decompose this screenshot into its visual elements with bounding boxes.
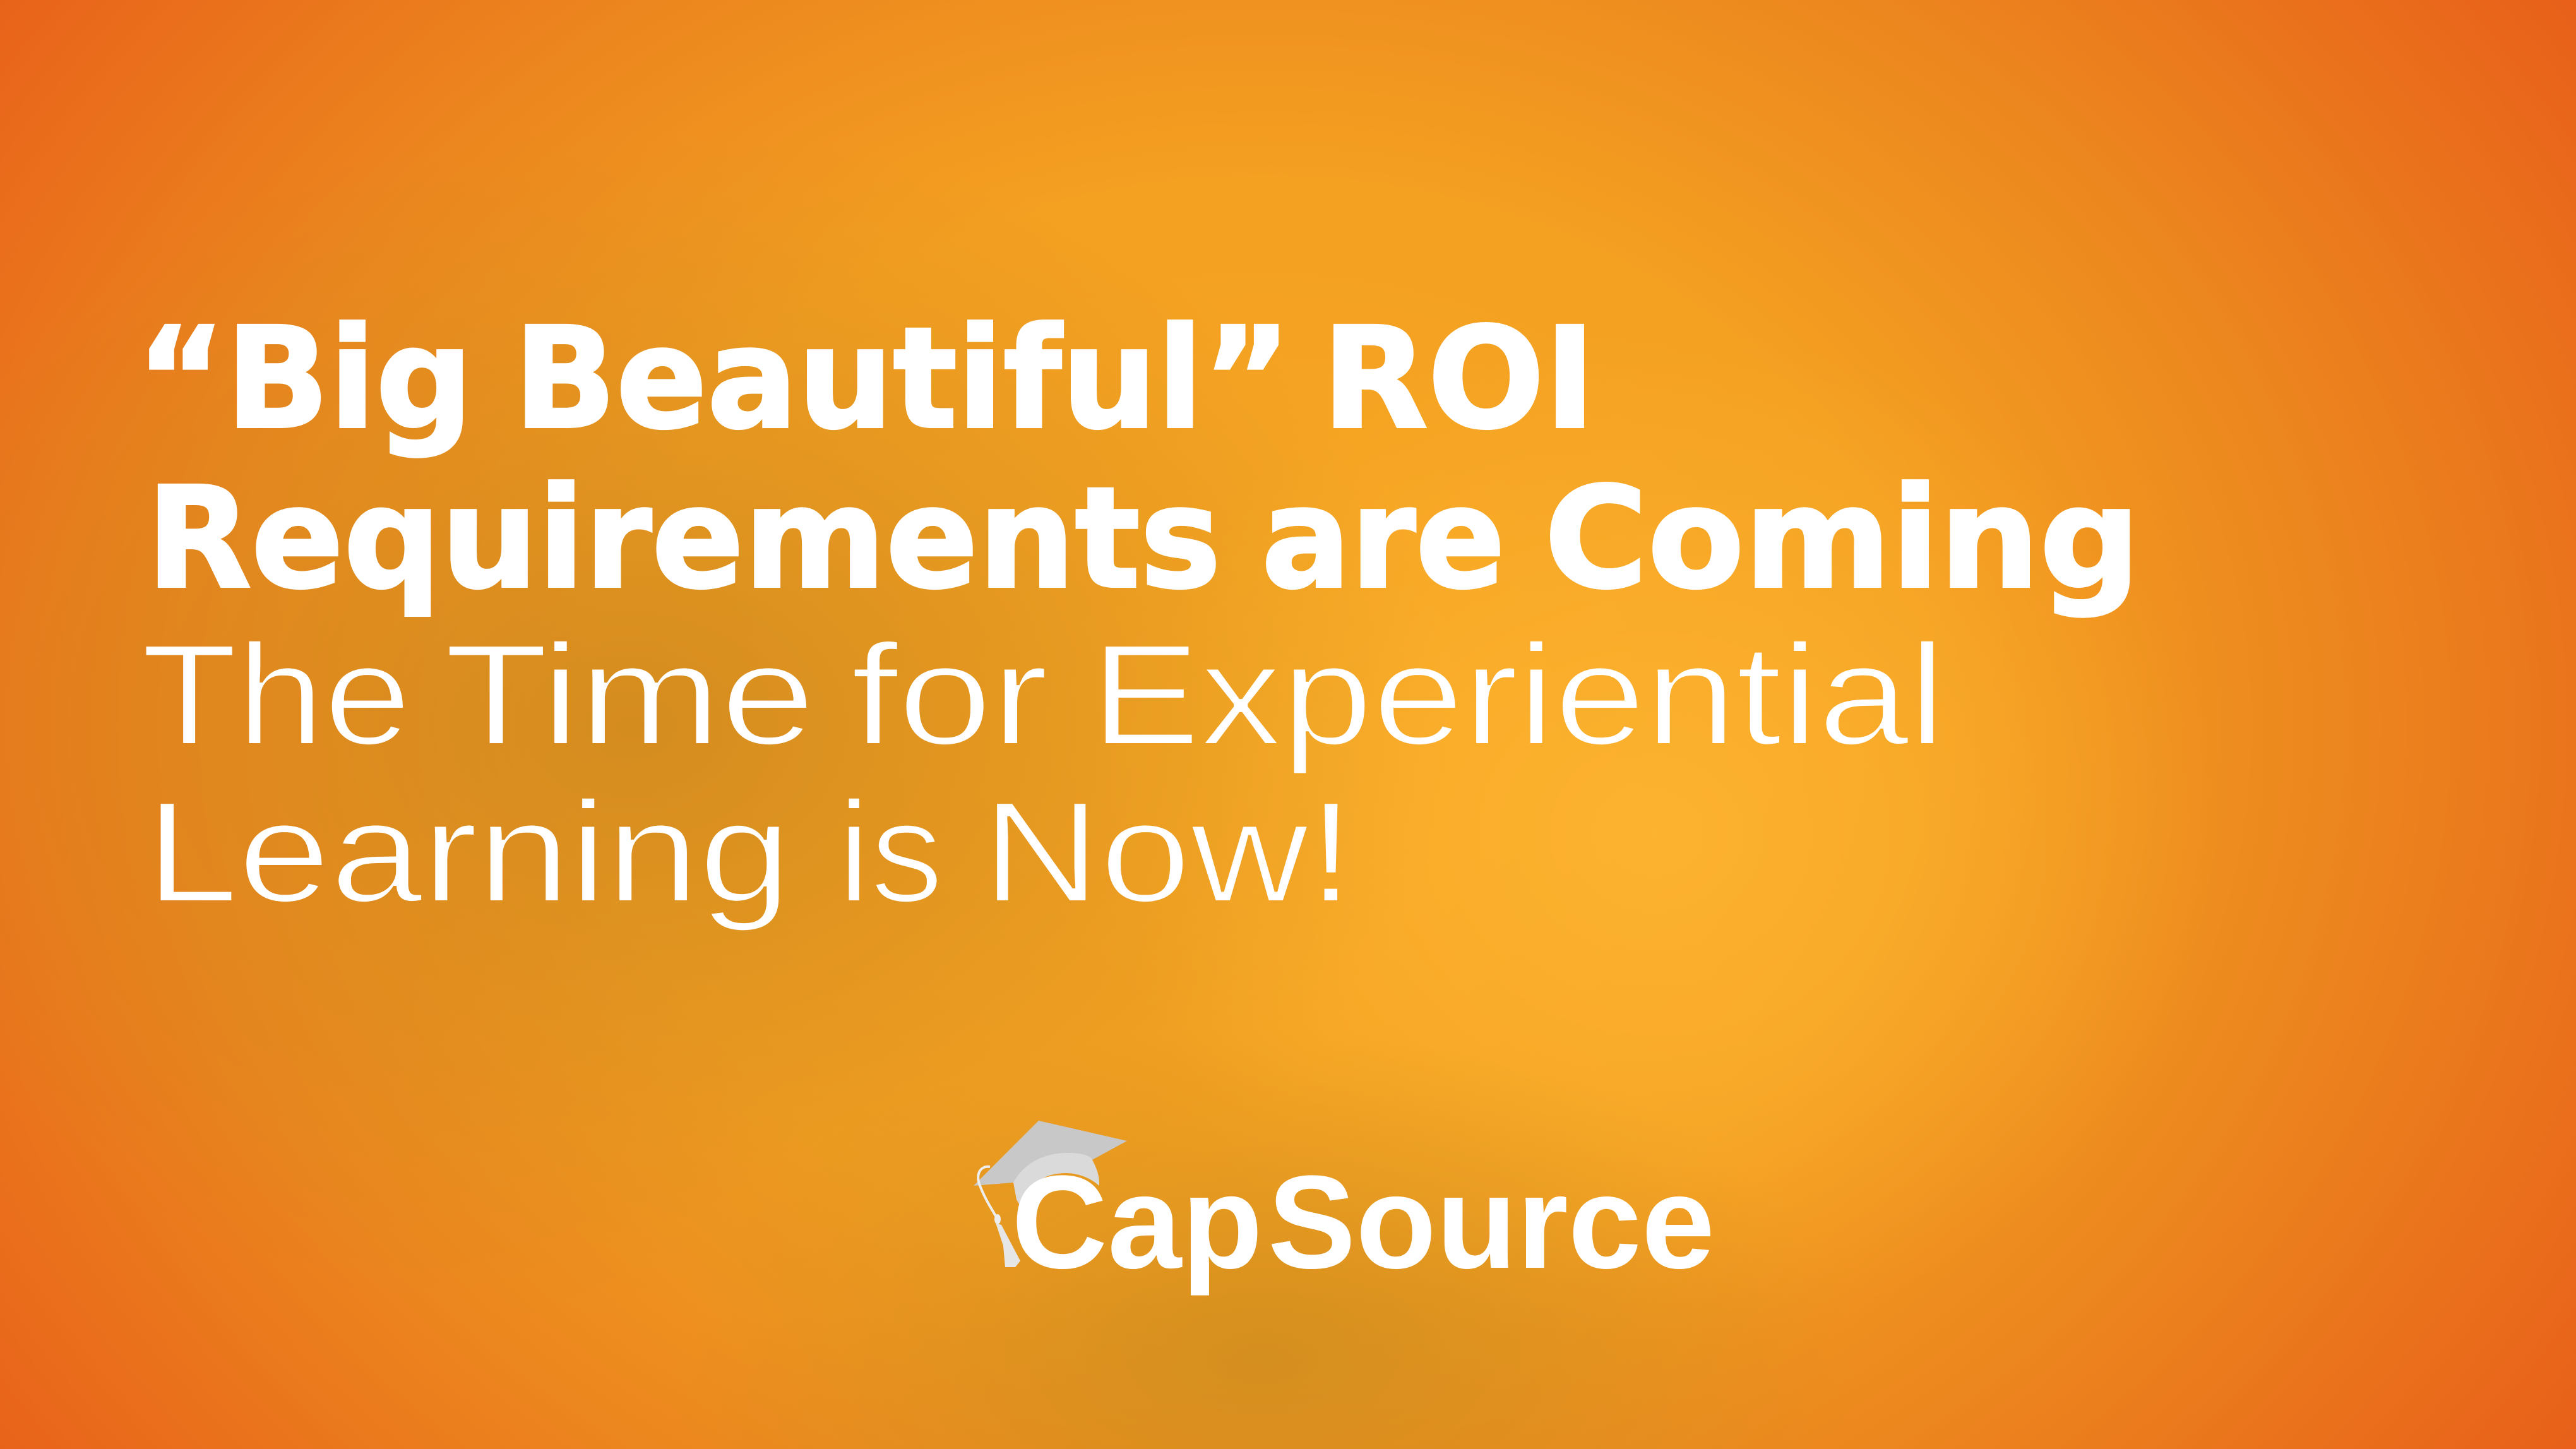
- subtitle: light headline: Learning: [146, 772, 791, 933]
- subtitle: light headline: for: [851, 615, 1048, 775]
- logo wordmark: Cap: [1011, 1148, 1263, 1296]
- subtitle: light headline: is: [838, 772, 943, 933]
- subtitle: light headline: Time: [444, 615, 815, 775]
- title: bold headline: Coming: [1544, 458, 2140, 620]
- subtitle: light headline: Experiential: [1091, 615, 1945, 775]
- title: bold headline: ROI: [1322, 298, 1595, 460]
- logo wordmark: [1011, 1148, 1715, 1296]
- title: bold headline: Requirements: [146, 458, 1221, 620]
- title: bold headline: [136, 298, 2140, 620]
- title: bold headline: are: [1261, 458, 1505, 620]
- title: bold headline: Beautiful”: [514, 298, 1291, 460]
- subtitle: light headline: [141, 615, 1945, 933]
- logo: CapSource: [974, 1121, 1715, 1296]
- logo wordmark: Source: [1268, 1148, 1715, 1296]
- subtitle: light headline: The: [141, 615, 411, 775]
- subtitle: light headline: Now!: [982, 772, 1354, 933]
- title: bold headline: “Big: [136, 298, 473, 460]
- icon: graduation cap: [974, 1121, 1127, 1267]
